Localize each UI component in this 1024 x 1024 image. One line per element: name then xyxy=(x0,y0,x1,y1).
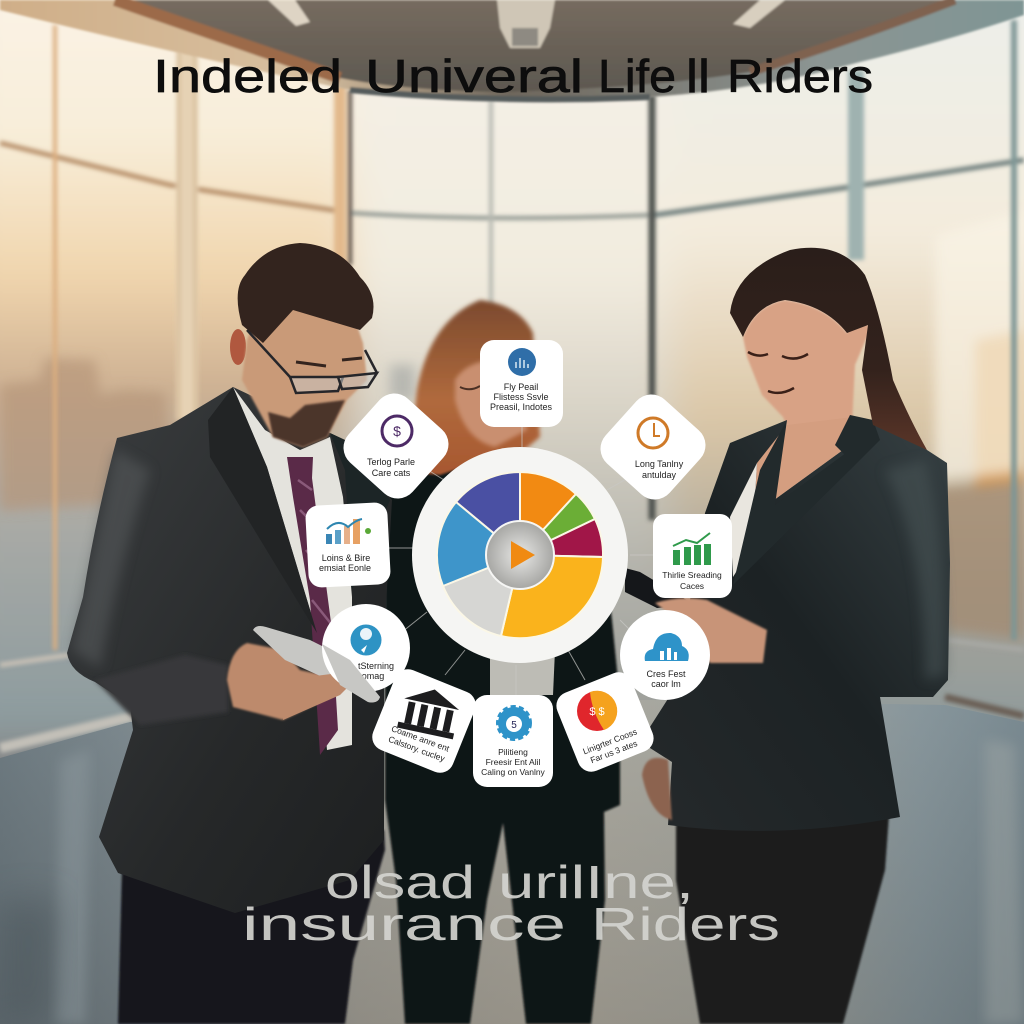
hair xyxy=(730,248,927,450)
hand at side xyxy=(642,758,672,820)
ceiling xyxy=(0,0,1024,99)
head xyxy=(242,300,367,447)
card: top centre: Flistess Ssvle xyxy=(493,392,549,402)
card: right growth chart xyxy=(653,514,732,598)
card: right circle: Cres Fest xyxy=(646,669,686,679)
icon: blue gear: 5 xyxy=(511,720,517,731)
eye xyxy=(460,386,480,389)
icon: bank building xyxy=(397,683,462,739)
card: left diamond: Care cats xyxy=(372,468,411,478)
title: Indeled xyxy=(153,50,342,102)
ear xyxy=(230,329,246,365)
card: left diamond xyxy=(335,385,457,507)
person: man with tablet xyxy=(67,243,392,1024)
tablet corner over left circle xyxy=(322,644,380,702)
slice: yellow xyxy=(501,555,603,638)
beard xyxy=(268,400,345,447)
lapel xyxy=(208,387,317,633)
hand xyxy=(655,598,767,663)
icon: blue bars xyxy=(508,348,536,376)
slice: gray xyxy=(443,555,520,636)
fingers xyxy=(283,672,350,720)
card: top centre xyxy=(480,340,563,427)
card: centre bottom: Pilitieng xyxy=(498,747,528,757)
face and neck xyxy=(743,300,870,435)
card: right circle: caor lm xyxy=(651,679,681,689)
suit xyxy=(385,448,620,1024)
card: left diamond: Terlog Parle xyxy=(367,457,415,467)
hair xyxy=(238,243,374,343)
tablet xyxy=(625,568,695,608)
card: centre bottom xyxy=(473,695,553,787)
card: right diamond: Long Tanlny xyxy=(635,459,684,469)
icon: red orange coin: $ $ xyxy=(589,706,605,718)
person: woman on right xyxy=(625,248,950,1024)
central pie chart hub xyxy=(412,447,628,663)
icon: purple dollar ring: $ xyxy=(393,423,401,439)
person: woman in the middle xyxy=(385,300,620,1024)
card: left circle: tSterning xyxy=(358,661,394,671)
shirt xyxy=(233,387,352,750)
glasses xyxy=(247,330,377,393)
eyebrows xyxy=(296,358,362,366)
bank card text: Coame anre ent xyxy=(390,723,451,754)
title: Life xyxy=(598,50,676,102)
card: top centre: Fly Peail xyxy=(504,382,538,392)
slice: crimson xyxy=(520,519,603,557)
lapel xyxy=(733,420,855,585)
tie xyxy=(287,457,338,755)
subtitle: olsad xyxy=(325,856,475,908)
right bottom card text: Linigrter Cooss xyxy=(581,726,638,756)
tablet xyxy=(253,626,380,702)
hand under tablet xyxy=(227,643,347,720)
face xyxy=(455,359,527,447)
slice: blue xyxy=(437,502,520,586)
card: left chart: Loins & Bire xyxy=(322,553,370,563)
sleeve highlight xyxy=(72,450,150,668)
card: bank xyxy=(368,665,480,777)
connector lines xyxy=(388,425,655,695)
title: Riders xyxy=(727,50,873,102)
icon: blue pin xyxy=(350,624,382,656)
icon: green bars xyxy=(673,533,711,565)
slice: green xyxy=(520,494,595,555)
card: right diamond: antulday xyxy=(642,470,677,480)
card: right circle xyxy=(620,610,710,700)
slice: orange xyxy=(520,472,576,555)
subtitle: Riders xyxy=(591,898,780,950)
trousers xyxy=(676,800,889,1024)
card: right growth chart: Thirlie Sreading xyxy=(662,570,722,580)
hub circle xyxy=(486,521,554,589)
card: left circle: omag xyxy=(362,671,384,681)
title: Univeral xyxy=(365,50,583,102)
icon: bar chart xyxy=(326,519,371,544)
chest xyxy=(755,417,853,508)
jacket xyxy=(67,387,392,913)
play icon xyxy=(511,541,535,569)
subtitle: insurance xyxy=(242,898,566,950)
eyes and lips xyxy=(748,352,808,393)
card: left chart xyxy=(305,502,391,588)
slice: indigo xyxy=(456,472,520,555)
hair xyxy=(414,300,540,500)
card: right bottom xyxy=(552,668,658,776)
subtitle: urilIne, xyxy=(498,856,694,908)
floor xyxy=(0,700,1024,1024)
card: right diamond xyxy=(592,386,714,508)
sleeve highlight xyxy=(885,460,945,680)
card: left chart: emsiat Eonle xyxy=(319,563,371,573)
icon: blue cloud xyxy=(645,633,689,661)
title: ll xyxy=(686,50,710,102)
bank card text: Calstory. cucley xyxy=(387,734,447,764)
card: centre bottom: Freesir Ent Alil xyxy=(486,757,541,767)
card: left circle xyxy=(322,604,410,692)
white top xyxy=(730,463,775,577)
card: centre bottom: Caling on Vanlny xyxy=(481,767,546,777)
icon: orange clock xyxy=(638,418,668,448)
icon: red orange coin xyxy=(577,691,617,731)
right bottom card text: Far us 3 ates xyxy=(589,738,639,765)
card: top centre: Preasil, Indotes xyxy=(490,402,553,412)
card: right growth chart: Caces xyxy=(680,581,704,591)
shirt xyxy=(490,650,555,695)
jacket xyxy=(648,420,950,831)
trousers xyxy=(118,830,385,1024)
